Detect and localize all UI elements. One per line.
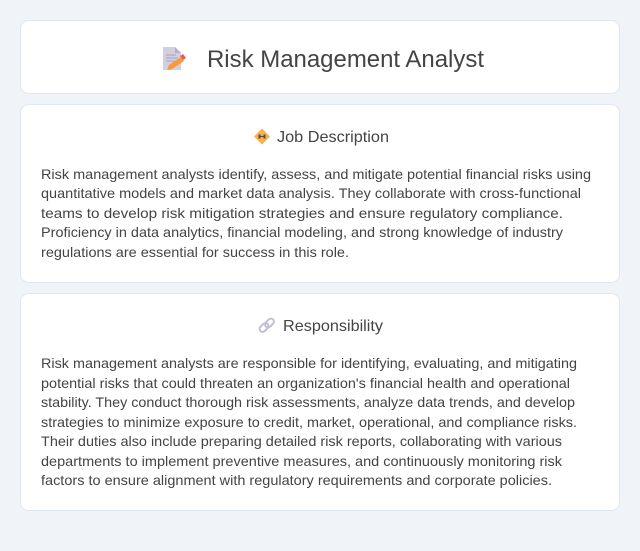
text block: responsibility: strategies to minimize exposure to credit, market, operational, and compliance risks. — [41, 414, 577, 430]
panel: title card — [20, 20, 620, 94]
text block: job description: quantitative models and market data analysis. They collaborate with cross-functional — [41, 185, 581, 201]
text block: job description — [41, 166, 591, 260]
icon: document with pencil — [163, 47, 186, 70]
text block: job description: Risk management analysts identify, assess, and mitigate potential financial risks using — [41, 166, 591, 182]
panel: responsibility — [20, 294, 620, 510]
text block: job description: regulations are essential for success in this role. — [41, 244, 349, 260]
text block: responsibility — [41, 355, 577, 488]
title: Risk Management Analyst — [207, 46, 484, 73]
text block: job description: Proficiency in data analytics, financial modeling, and strong knowledge of industry — [41, 224, 563, 240]
icon: chain link — [258, 317, 275, 333]
text block: responsibility: potential risks that could threaten an organization's financial health and operational — [41, 375, 570, 391]
icon: orange diamond — [254, 128, 270, 144]
text block: responsibility: factors to ensure alignment with regulatory requirements and corporate policies. — [41, 472, 552, 488]
text block: responsibility: stability. They conduct thorough risk assessments, analyze data trends, and develop — [41, 394, 575, 410]
text block: job description: teams to develop risk mitigation strategies and ensure regulatory compliance. — [41, 205, 563, 221]
heading: responsibility: Responsibility — [283, 318, 383, 335]
text block: responsibility: Risk management analysts are responsible for identifying, evaluating, and mitigating — [41, 355, 577, 371]
text block: responsibility: departments to implement preventive measures, and continuously monitoring risk — [41, 453, 563, 469]
text block: responsibility: Their duties also include preparing detailed risk reports, collaborating with various — [41, 433, 562, 449]
heading: job description: Job Description — [277, 129, 389, 146]
panel: job description — [20, 104, 620, 282]
